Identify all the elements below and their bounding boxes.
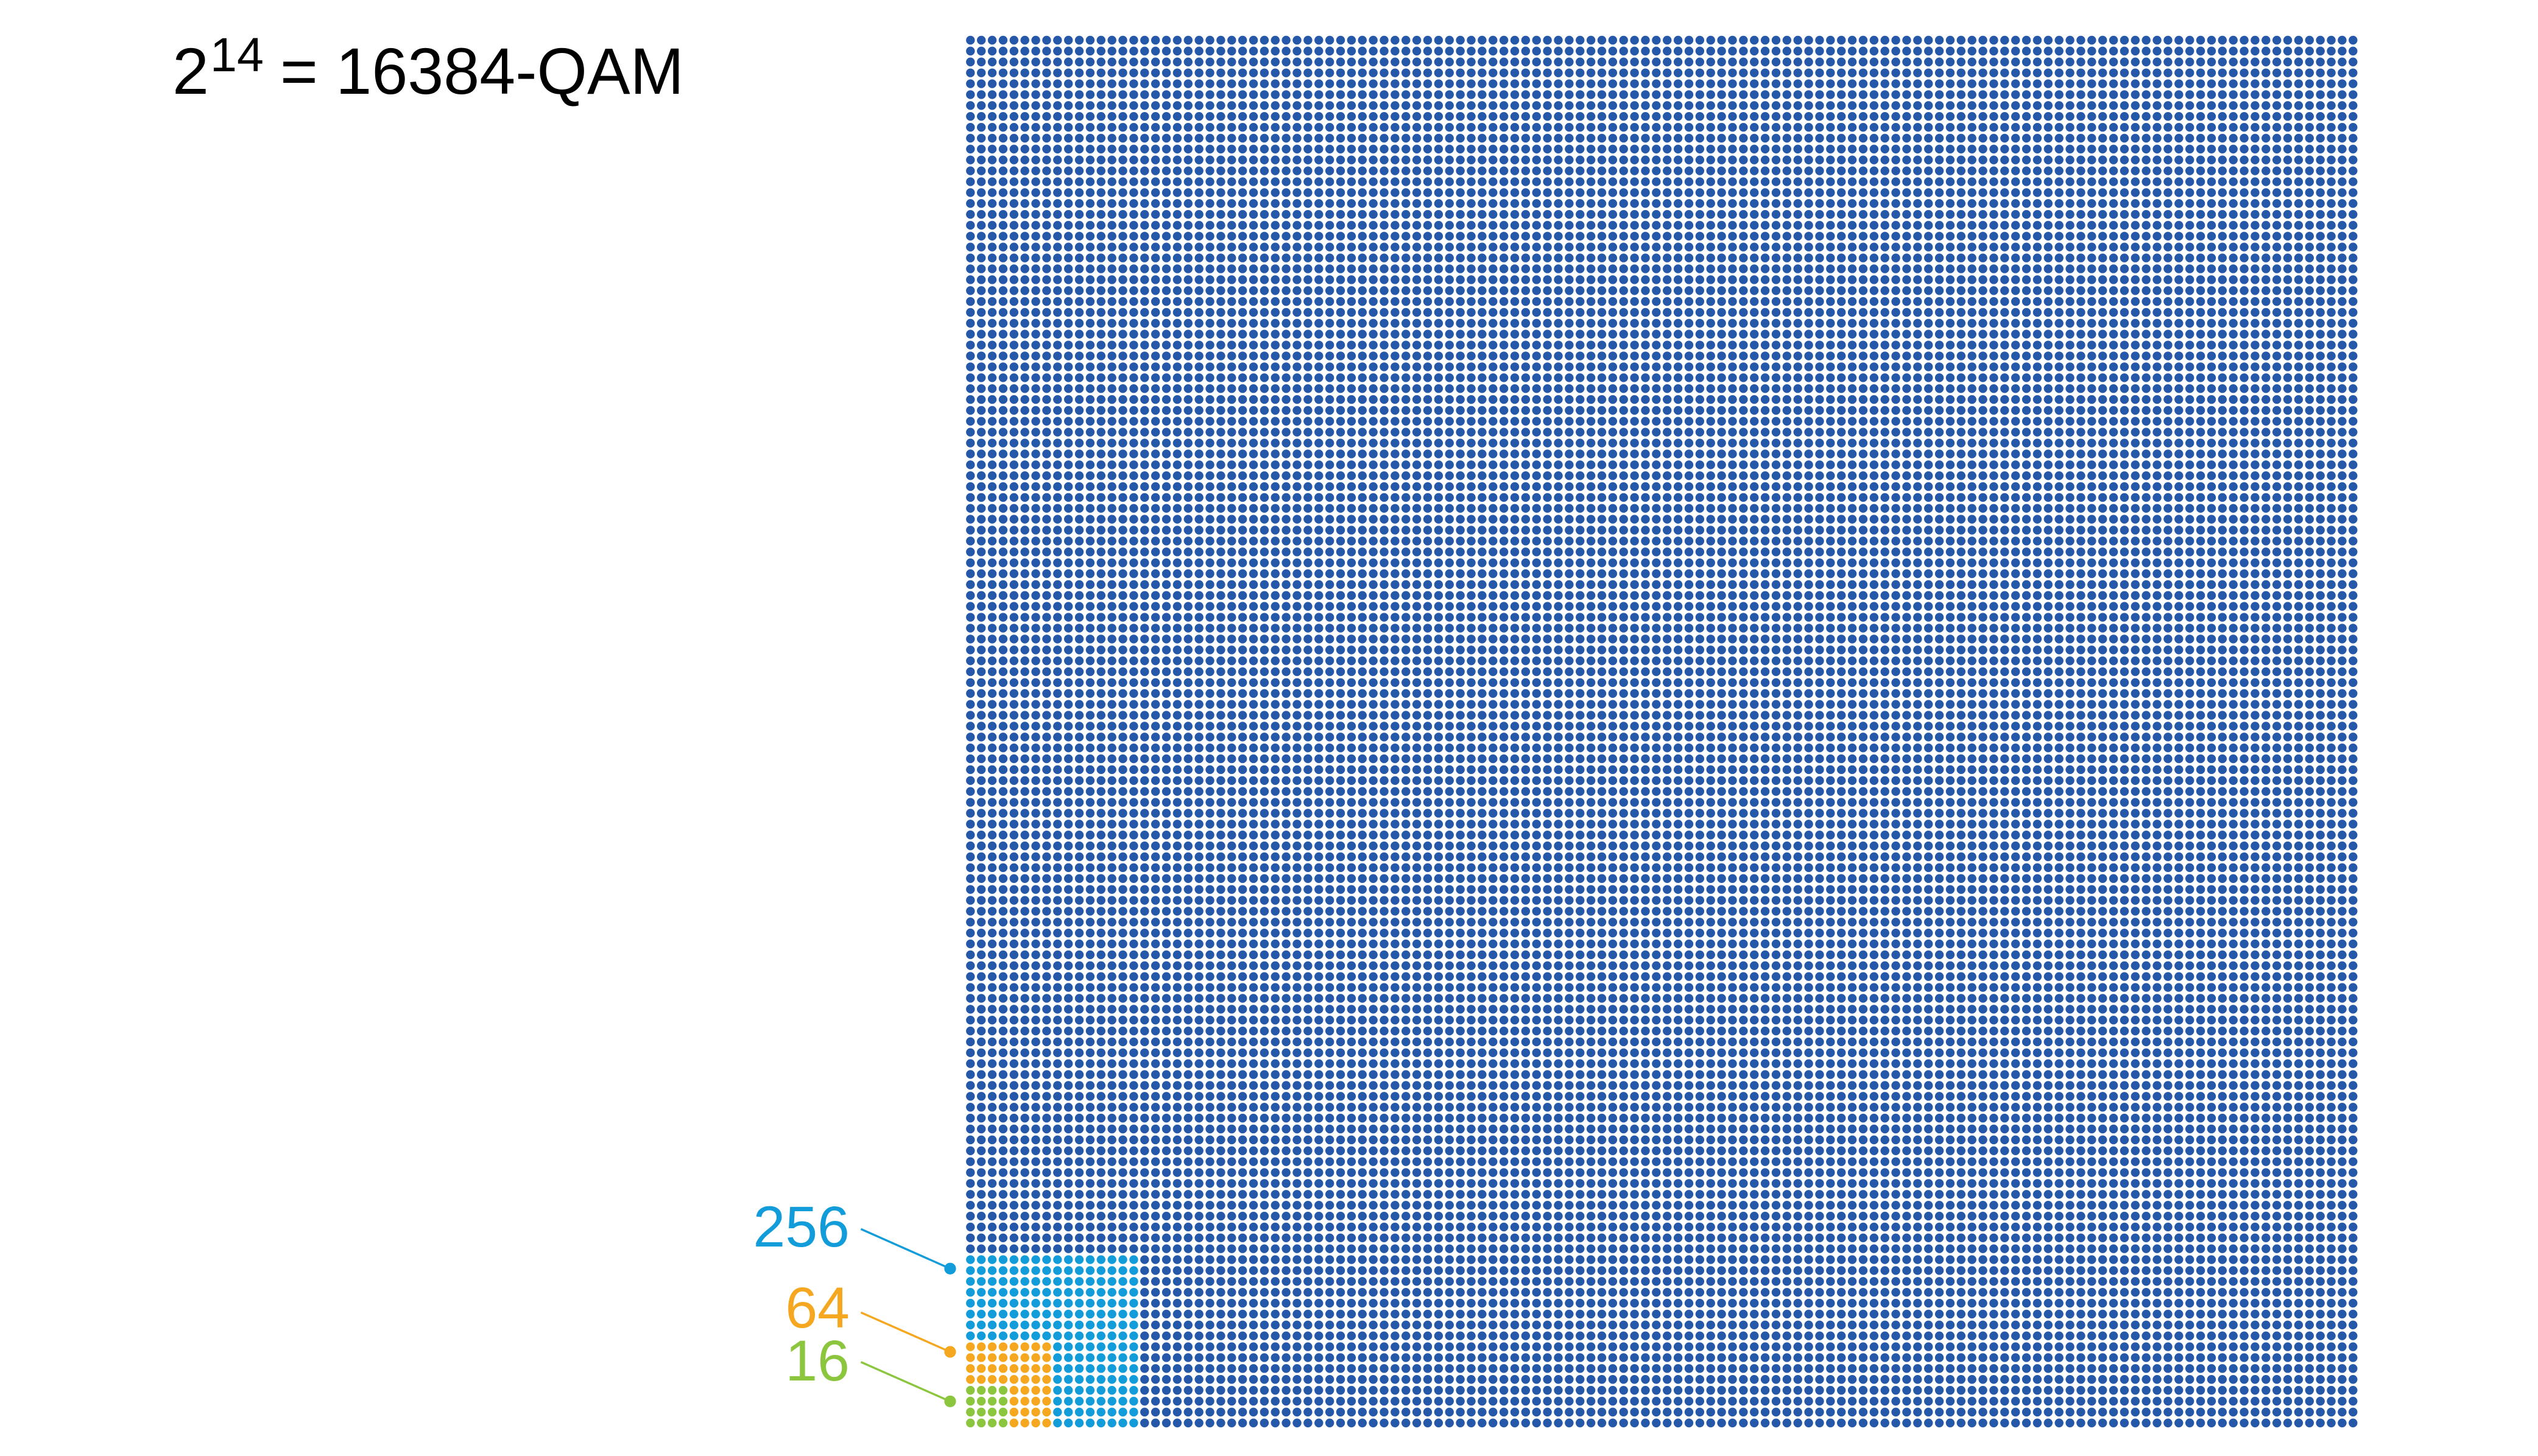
callout: 16 (785, 1329, 956, 1407)
callout: 16: 16 (785, 1329, 850, 1393)
dots: 64-QAM orange (970, 1347, 1046, 1423)
callout: 256 (753, 1195, 956, 1275)
dots: 16384-QAM dark blue (970, 40, 2353, 1423)
callout: 64 (785, 1276, 956, 1358)
dots: 256-QAM light blue (970, 1260, 1133, 1423)
title: 2^14 = 16384-QAM: 14 (210, 27, 264, 82)
title: 2^14 = 16384-QAM: 2 (172, 34, 209, 108)
callout: 256: 256 (753, 1195, 850, 1259)
dot grid: 128 by 128 constellation (970, 40, 2353, 1423)
callout: 64: 64 (785, 1276, 850, 1340)
title: 2^14 = 16384-QAM: = 16384-QAM (280, 34, 684, 108)
dots: 16-QAM green (970, 1390, 1003, 1423)
